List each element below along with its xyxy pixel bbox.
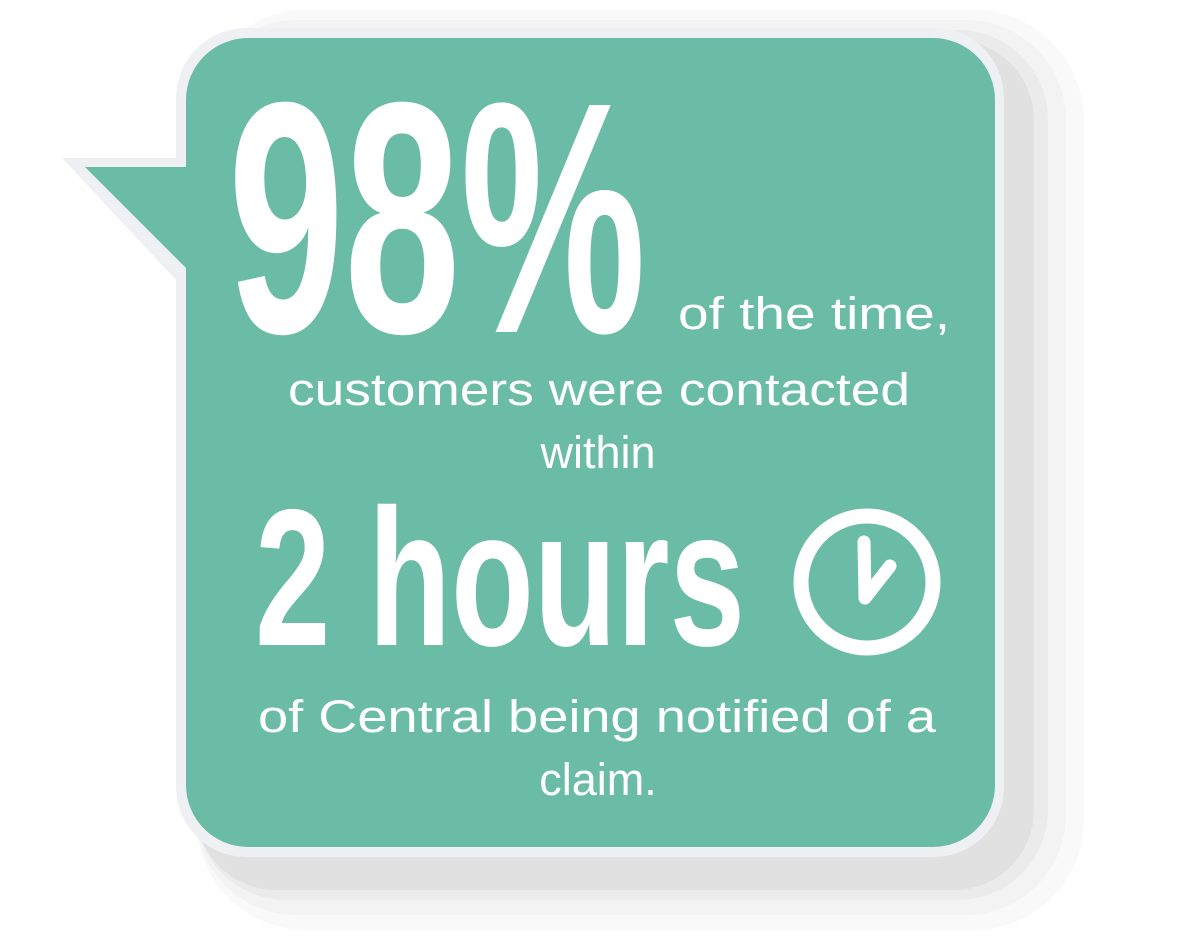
text: of Central being notified of a claim (258, 691, 937, 805)
big stat: 98%: 98% (228, 33, 646, 402)
text: of Central being notified of a claim: of Central being notified of a (258, 691, 937, 742)
text: of Central being notified of a claim: claim. (539, 754, 657, 805)
text: of the time: of the time, (678, 288, 950, 339)
text: customers were contacted within (288, 364, 910, 478)
text: customers were contacted within: customers were contacted (288, 364, 910, 415)
shadow layers (196, 10, 1084, 930)
big stat: 2 hours: 2 hours (255, 469, 745, 687)
text: customers were contacted within: within (539, 427, 656, 478)
icon: clock (801, 516, 933, 648)
speech bubble (62, 28, 1004, 857)
